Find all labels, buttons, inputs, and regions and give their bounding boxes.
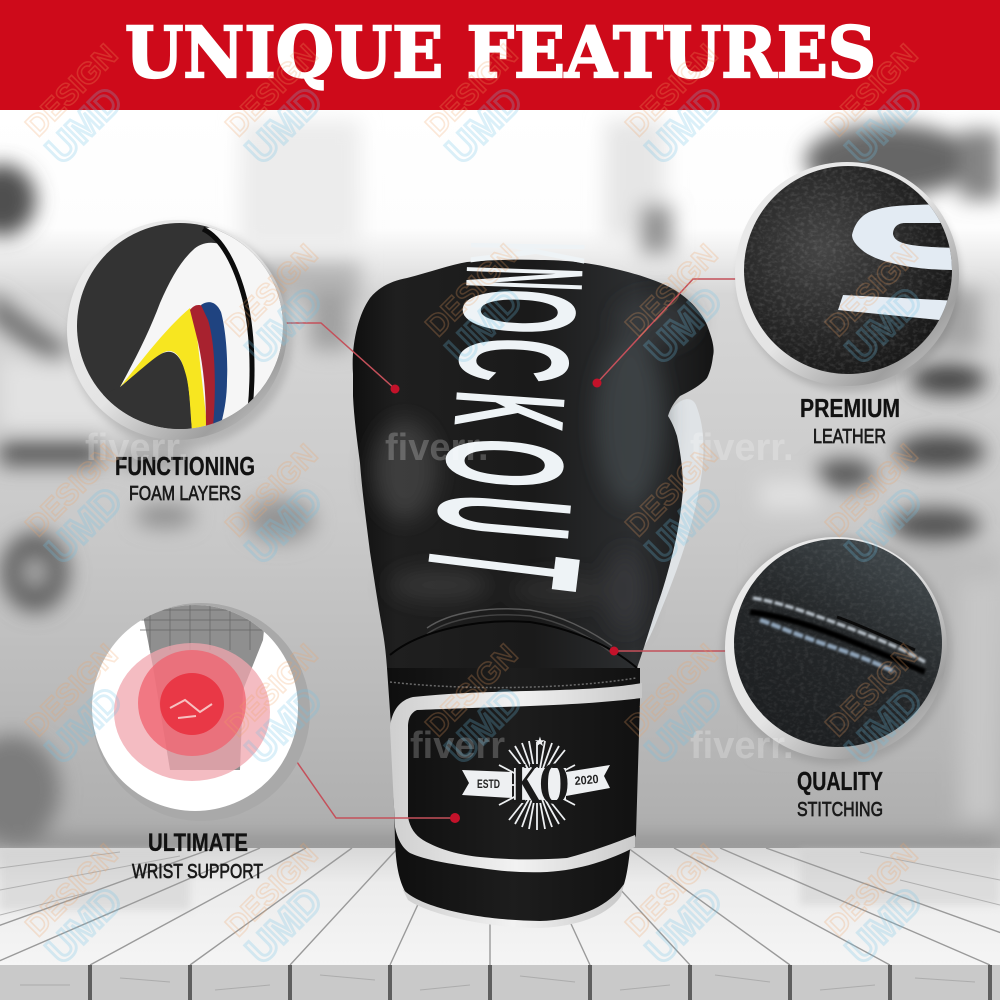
KO emblem [462,734,610,830]
heading: ultimate wrist support: WRIST SUPPORT [132,861,263,883]
boxing glove [353,240,714,928]
heading: ultimate wrist support [132,829,263,883]
design watermarks: DESIGN [820,838,924,943]
cuff top stitching [390,678,636,688]
fiverr watermarks: fiverr [410,725,505,767]
KNOCKOUT lettering: N [430,264,618,293]
design watermarks: DESIGN [420,638,524,743]
heading: functioning foam layers [115,451,255,505]
foam cross-section [77,223,283,429]
KNOCKOUT lettering: C [425,335,600,386]
heading: premium leather: LEATHER [813,426,886,448]
design watermarks: UMD [838,79,931,172]
KNOCKOUT lettering: O [429,286,610,337]
design watermarks: DESIGN [20,438,124,543]
design watermarks: DESIGN [420,38,524,143]
title: UNIQUE FEATURES [125,11,876,94]
design watermarks: UMD [38,879,131,972]
KO emblem: KO [511,754,569,816]
design watermarks: DESIGN [620,838,724,943]
leather close-up [744,166,952,374]
design watermarks: UMD [38,479,131,572]
design watermarks: UMD [838,279,931,372]
design watermarks: DESIGN [820,238,924,343]
design watermarks: DESIGN [620,638,724,743]
blurred gym background [0,110,1000,850]
seam stitching [427,609,612,646]
header banner [0,0,1000,110]
fiverr watermarks [85,427,794,767]
design watermarks: DESIGN [620,438,724,543]
KO emblem: ESTD [477,777,500,791]
design watermarks: UMD [38,679,131,772]
star: ★ [534,734,546,749]
callout line: foam layers [285,323,400,394]
design watermarks: UMD [638,679,731,772]
wooden floor [0,848,1000,1000]
KNOCKOUT lettering: T [381,535,627,598]
heading: premium leather [800,393,900,448]
stitching close-up [734,539,942,747]
design watermarks: UMD [438,79,531,172]
design watermarks: UMD [638,279,731,372]
design watermarks: UMD [238,79,331,172]
design watermarks: DESIGN [20,638,124,743]
callout line: premium leather [592,279,745,388]
design watermarks: UMD [38,79,131,172]
heading: premium leather: PREMIUM [800,393,900,423]
fiverr watermarks: fiverr. [690,725,794,767]
heading: functioning foam layers: FUNCTIONING [115,451,255,481]
KNOCKOUT lettering: K [421,387,598,435]
panel: premium leather [735,162,961,392]
design watermarks: DESIGN [820,638,924,743]
design watermarks: DESIGN [820,438,924,543]
design watermarks: UMD [438,279,531,372]
design watermarks: DESIGN [220,38,324,143]
design watermarks: UMD [838,479,931,572]
velcro strap silver trim [390,683,642,872]
fiverr watermarks: fiverr. [85,427,189,469]
panel: wrist support [92,600,310,821]
ribbon ESTD [462,770,512,798]
callout line: quality stitching [610,646,735,656]
design watermarks: UMD [838,879,931,972]
heading: ultimate wrist support: ULTIMATE [148,829,248,857]
wrist x-ray [114,600,270,781]
design watermarks: DESIGN [220,638,324,743]
fiverr watermarks: fiverr. [385,427,489,469]
design watermarks: UMD [238,679,331,772]
design watermarks: UMD [438,679,531,772]
heading: quality stitching: STITCHING [797,799,883,821]
design watermarks: UMD [838,679,931,772]
design watermarks: DESIGN [20,838,124,943]
design watermarks: UMD [638,79,731,172]
heading: quality stitching [797,766,883,821]
design watermarks: DESIGN [220,238,324,343]
panel: foam layers [67,220,293,448]
design watermarks: UMD [238,279,331,372]
design watermarks: UMD [638,479,731,572]
design watermarks: UMD [238,879,331,972]
design watermarks: DESIGN [20,38,124,143]
design watermarks: DESIGN [620,38,724,143]
fiverr watermarks: fiverr. [690,427,794,469]
callout line: wrist support [290,752,460,823]
heading: functioning foam layers: FOAM LAYERS [129,483,241,505]
design watermarks: DESIGN [220,438,324,543]
design watermarks: DESIGN [620,238,724,343]
ribbon 2020 [566,765,610,796]
thumb padding [630,399,703,662]
KNOCKOUT lettering: K [434,240,618,265]
panel: quality stitching [722,535,952,765]
KNOCKOUT lettering [381,240,627,598]
design watermarks: DESIGN [420,238,524,343]
KNOCKOUT lettering: O [410,433,600,494]
heading: quality stitching: QUALITY [797,766,883,796]
KO emblem: 2020 [574,772,599,788]
KNOCKOUT lettering: U [397,487,613,546]
design watermarks: DESIGN [220,838,324,943]
design watermarks: UMD [638,879,731,972]
bottom silver trim [402,884,624,928]
leather highlights [373,296,695,630]
design watermarks: UMD [238,479,331,572]
design watermarks: DESIGN [820,38,924,143]
wrist cuff [387,668,640,923]
glove body [353,260,714,668]
